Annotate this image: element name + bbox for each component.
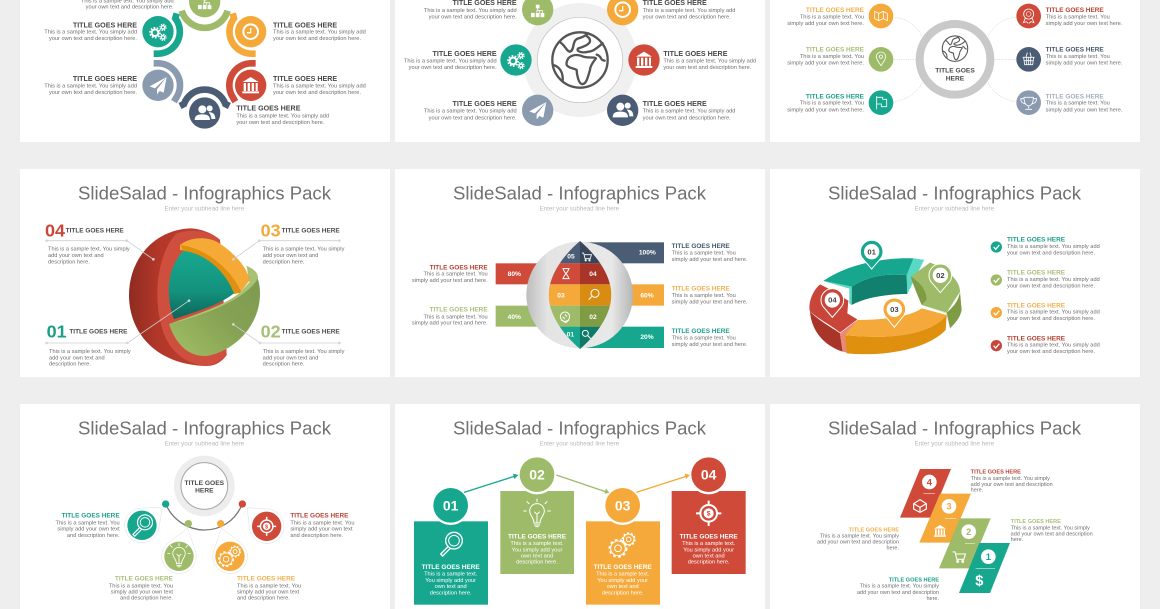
subheading: Enter your subhead line here	[540, 440, 620, 447]
text: top right: your own text and description here.	[643, 15, 731, 21]
text: step 1: TITLE GOES HERE	[889, 578, 939, 584]
hub ring	[920, 24, 990, 95]
ring segment: teal	[823, 258, 924, 305]
card 02: 02	[529, 467, 545, 483]
text: teal item: This is a sample text. You	[56, 520, 120, 526]
percentage labels: 20%	[640, 334, 654, 341]
subheading: Enter your subhead line here	[165, 440, 245, 447]
text: trophy item: simply add your own text here.	[1046, 107, 1123, 113]
label 04	[45, 220, 130, 265]
icon: bank node	[235, 70, 266, 101]
list item 4: This is a sample text. You simply add	[1007, 343, 1100, 349]
central badge: TITLE GOES	[185, 480, 225, 487]
pin 01	[860, 240, 883, 269]
text: middle right: your own text and description here.	[663, 65, 752, 71]
text: step 4	[971, 470, 1053, 494]
text: step 2: This is a sample text. You simply	[1011, 525, 1090, 531]
card 04: TITLE GOES HERE	[680, 534, 738, 541]
text: users step: your own text and description here.	[236, 120, 325, 126]
segment icons	[560, 253, 599, 339]
list item 4	[991, 335, 1100, 355]
icon: target: $	[265, 524, 268, 530]
card 03: This is a sample text.	[596, 572, 650, 578]
segment numbers: 05	[567, 254, 575, 261]
icon: org chart node	[189, 0, 220, 17]
text: red item: simply add your text and here.	[412, 278, 488, 284]
panel: hub and spoke	[770, 0, 1140, 142]
text: bottom left: your own text and description here.	[429, 115, 517, 121]
text: red item: and description here.	[290, 533, 344, 539]
subheading: Enter your subhead line here	[165, 205, 245, 212]
pin 02: 02	[936, 271, 945, 280]
label 02	[261, 321, 345, 368]
heading: SlideSalad - Infographics Pack	[78, 417, 332, 438]
list item 1: This is a sample text. You simply add	[1007, 244, 1100, 250]
step 1: $	[975, 573, 983, 589]
panel: isometric ring	[770, 169, 1140, 377]
globe ring	[523, 3, 637, 117]
connecting arc	[166, 504, 242, 530]
label 01: This is a sample text. You simply	[49, 349, 131, 355]
text: green item: TITLE GOES HERE	[430, 307, 488, 314]
ring segment: red	[809, 284, 857, 353]
text: plane step: your own text and description here.	[49, 90, 137, 96]
text: step 2	[1011, 519, 1093, 543]
text: red item: This is a sample text. You	[424, 272, 488, 278]
step 4	[900, 469, 951, 518]
text: teal item: simply add your text and here.	[672, 342, 748, 348]
text: flag item: simply add your own text here.	[787, 107, 864, 113]
panel: six-step hexagon cycle	[20, 0, 390, 142]
label 03: 03	[261, 220, 281, 240]
pin 04: 04	[828, 296, 837, 305]
step 2	[939, 518, 991, 568]
text: flag item: TITLE GOES HERE	[806, 93, 865, 100]
text: gears step: TITLE GOES HERE	[73, 21, 137, 29]
text: clock step	[273, 21, 366, 42]
dashed connectors	[894, 17, 1016, 102]
step 3	[919, 494, 971, 543]
text: orange item: This is a sample text. You	[237, 583, 301, 589]
label 04: TITLE GOES HERE	[66, 228, 124, 235]
text: map item: simply add your own text here.	[787, 21, 864, 27]
text: pin item: TITLE GOES HERE	[806, 47, 865, 54]
text: flag item: This is a sample text. You	[800, 101, 864, 107]
card 03: TITLE GOES HERE	[594, 564, 652, 571]
text: orange item: This is a sample text. You	[672, 293, 736, 299]
text: teal item: simply add your own text	[57, 527, 120, 533]
list item 4: your own text and description here.	[1007, 349, 1095, 355]
panel: layered sphere	[20, 169, 390, 377]
card 01: TITLE GOES HERE	[422, 564, 480, 571]
text: middle left	[404, 50, 497, 71]
card 02	[500, 455, 574, 574]
card 03: own text and	[607, 584, 639, 590]
card 01: own text and	[435, 584, 467, 590]
step 4: 4	[927, 477, 933, 487]
text: trophy item: TITLE GOES HERE	[1046, 93, 1104, 100]
text: green item: and description here.	[120, 596, 173, 602]
text: map item: This is a sample text. You	[800, 14, 864, 20]
text: step 4: here.	[971, 488, 984, 494]
text: gears step: your own text and description here.	[49, 36, 137, 42]
text: clock step: your own text and description here.	[273, 36, 361, 42]
callout lines	[47, 241, 339, 343]
label 01	[47, 321, 131, 368]
text: award item: TITLE GOES HERE	[1046, 7, 1104, 14]
icon: paper plane node	[142, 70, 174, 101]
text: green item: This is a sample text. You	[424, 314, 488, 320]
text: bottom left: This is a sample text. You simply add	[424, 109, 517, 115]
text: top right	[643, 0, 735, 21]
list item 4: TITLE GOES HERE	[1007, 335, 1066, 342]
pin 03: 03	[890, 305, 899, 314]
text: step 4: add your own text and description	[971, 482, 1053, 488]
card 01	[414, 486, 488, 605]
sphere illustration	[129, 228, 260, 366]
text: green item: simply add your text and here.	[412, 321, 488, 327]
text: pin item: simply add your own text here.	[787, 61, 864, 67]
card 02: TITLE GOES HERE	[508, 534, 567, 541]
text: users step: This is a sample text. You simply add	[236, 113, 329, 119]
text: basket item	[1046, 47, 1123, 67]
step 1: 1	[986, 552, 991, 562]
list item 2: TITLE GOES HERE	[1007, 270, 1066, 277]
icon: gears	[215, 542, 245, 571]
ring segment: green	[911, 263, 962, 328]
text: step 1: here.	[926, 596, 939, 602]
list item 3	[991, 302, 1100, 322]
label 03: TITLE GOES HERE	[282, 228, 340, 235]
text: award item: simply add your own text here.	[1046, 21, 1123, 27]
text: teal item: This is a sample text. You	[672, 336, 736, 342]
card 01: You simply add your	[425, 578, 476, 584]
list item 3: This is a sample text. You simply add	[1007, 310, 1100, 316]
text: step 1	[857, 578, 939, 602]
label 02: 02	[261, 321, 281, 341]
text: basket item: simply add your own text here.	[1046, 61, 1123, 67]
text: step 3: add your own text and description	[817, 540, 899, 546]
panel: globe with six items	[395, 0, 765, 142]
card 03: description here.	[602, 590, 644, 596]
list item 1	[991, 237, 1100, 256]
pin 02	[929, 264, 952, 293]
icon: globe	[942, 36, 968, 61]
text: top step	[81, 0, 174, 11]
card 04: This is a sample text.	[682, 541, 736, 547]
heading: SlideSalad - Infographics Pack	[453, 182, 707, 203]
list item 1: TITLE GOES HERE	[1007, 237, 1066, 244]
text: navy item: This is a sample text. You	[672, 251, 736, 257]
text: map item: TITLE GOES HERE	[806, 7, 865, 14]
text: trophy item	[1046, 93, 1123, 113]
icon: target	[252, 512, 281, 541]
text: middle right: This is a sample text. You simply add	[663, 59, 756, 65]
panel: stepped parallelograms	[770, 404, 1140, 609]
heading: SlideSalad - Infographics Pack	[828, 417, 1082, 438]
heading: SlideSalad - Infographics Pack	[78, 182, 332, 203]
text: bottom left: TITLE GOES HERE	[453, 100, 517, 108]
card 03: You simply add your	[597, 578, 648, 584]
label 02: add your own text and	[263, 355, 318, 361]
icon: users node	[607, 95, 638, 126]
icon: plane node	[522, 95, 553, 126]
text: step 2: TITLE GOES HERE	[1011, 519, 1061, 525]
text: users step: TITLE GOES HERE	[236, 105, 301, 113]
cycle arcs	[154, 11, 256, 106]
icon: bank node	[628, 44, 660, 76]
text: green item: This is a sample text. You	[109, 583, 173, 589]
text: teal item: TITLE GOES HERE	[672, 328, 730, 335]
text: teal item	[56, 513, 120, 539]
silver sphere	[526, 242, 633, 348]
list item 3: your own text and description here.	[1007, 316, 1095, 322]
text: green item: TITLE GOES HERE	[115, 576, 174, 583]
card 04: description here.	[688, 560, 730, 566]
panel: segmented lens with percentage bars	[395, 169, 765, 377]
percentage labels	[508, 250, 656, 341]
label 01: add your own text and	[49, 355, 105, 361]
arrow: 01 to 02	[464, 474, 518, 492]
text: teal item: and description here.	[67, 533, 120, 539]
icon: pin node	[869, 47, 893, 72]
icon: users node	[189, 97, 220, 129]
text: teal item	[672, 328, 748, 348]
text: gears step	[44, 21, 137, 42]
percentage bars	[496, 242, 664, 348]
icon: clock node	[607, 0, 638, 25]
label 04: This is a sample text. You simply	[48, 247, 130, 253]
ring segment: orange	[844, 308, 947, 354]
icon: award node	[1016, 4, 1041, 28]
label 04: add your own text and	[48, 253, 104, 259]
label 01: TITLE GOES HERE	[69, 329, 128, 336]
text: navy item	[672, 243, 748, 263]
text: navy item: TITLE GOES HERE	[672, 243, 730, 250]
text: orange item: TITLE GOES HERE	[237, 576, 296, 583]
percentage labels: 40%	[508, 314, 521, 321]
icon: flag node	[869, 90, 893, 115]
text: trophy item: This is a sample text. You	[1046, 101, 1110, 107]
label 02: This is a sample text. You simply	[263, 349, 345, 355]
heading: SlideSalad - Infographics Pack	[453, 417, 707, 438]
text: red item: simply add your own text	[290, 527, 353, 533]
percentage labels: 80%	[508, 271, 521, 278]
card 02: own text and	[521, 554, 553, 560]
card 02: This is a sample text.	[510, 541, 564, 547]
text: orange item	[672, 286, 748, 305]
card 04: You simply add your	[683, 547, 734, 553]
text: step 2: here.	[1011, 537, 1024, 543]
label 03	[261, 220, 345, 265]
list item 2: This is a sample text. You simply add	[1007, 277, 1100, 283]
text: red item: TITLE GOES HERE	[430, 264, 488, 271]
text: pin item: This is a sample text. You	[800, 54, 864, 60]
card 04: 04	[701, 467, 717, 483]
text: plane step: This is a sample text. You simply add	[44, 83, 137, 89]
text: orange item: simply add your text and here.	[672, 299, 748, 305]
label 01: 01	[47, 321, 67, 341]
text: red item	[412, 264, 488, 284]
label 03: add your own text and	[263, 253, 318, 259]
pin 04	[821, 289, 844, 317]
text: bank step	[273, 75, 366, 96]
hub label: HERE	[946, 75, 965, 82]
pin 01: 01	[867, 247, 877, 256]
list item 3: TITLE GOES HERE	[1007, 302, 1066, 309]
subheading: Enter your subhead line here	[915, 440, 995, 447]
text: step 3: TITLE GOES HERE	[849, 527, 899, 533]
text: step 1: This is a sample text. You simply	[860, 584, 939, 590]
percentage labels: 60%	[640, 292, 654, 299]
list item 2: your own text and description here.	[1007, 283, 1095, 289]
text: basket item: TITLE GOES HERE	[1046, 47, 1104, 54]
text: pin item	[787, 47, 865, 67]
text: orange item	[237, 576, 301, 602]
card 03	[586, 486, 660, 605]
card 04: own text and	[693, 554, 725, 560]
step 2: 2	[966, 527, 971, 537]
card 02: You simply add your	[512, 547, 562, 553]
icon: org chart node	[522, 0, 553, 25]
arrow: 02 to 03	[556, 475, 609, 494]
card 04: $	[707, 511, 711, 518]
callout dots	[45, 239, 341, 344]
icon: bulb	[164, 542, 194, 571]
panel: four stepped cards	[395, 404, 765, 609]
text: red item: TITLE GOES HERE	[290, 513, 349, 520]
text: middle left: TITLE GOES HERE	[433, 50, 497, 58]
text: top step: your own text and description here.	[86, 5, 174, 11]
percentage labels: 100%	[639, 250, 656, 257]
text: step 3: This is a sample text. You simply	[820, 534, 899, 540]
segment numbers	[557, 254, 597, 339]
icon: trophy node	[1016, 90, 1041, 115]
text: navy item: simply add your text and here.	[672, 257, 748, 263]
text: top left	[424, 0, 517, 21]
segment numbers: 01	[567, 332, 574, 339]
text: bottom left	[424, 100, 517, 121]
text: award item: This is a sample text. You	[1046, 14, 1110, 20]
label 01: description here.	[49, 362, 91, 368]
text: clock step: TITLE GOES HERE	[273, 21, 337, 29]
text: top right: This is a sample text. You simply add	[643, 8, 735, 14]
segment numbers: 03	[557, 292, 565, 299]
text: red item: This is a sample text. You	[290, 520, 354, 526]
icon: gears node	[500, 44, 532, 76]
step 1	[959, 543, 1010, 593]
card 04	[672, 455, 746, 574]
text: award item	[1046, 7, 1123, 27]
text: gears step: This is a sample text. You simply add	[44, 30, 137, 36]
step 3: 3	[946, 502, 952, 512]
text: green item: simply add your own text	[111, 590, 173, 596]
hub label	[935, 68, 975, 82]
text: orange item: TITLE GOES HERE	[672, 286, 730, 293]
icon: globe	[552, 32, 608, 88]
text: step 3: here.	[886, 546, 899, 552]
text: users step	[236, 105, 329, 126]
lens segments	[548, 240, 612, 350]
card 02: description here.	[516, 560, 558, 566]
card 03: 03	[615, 497, 631, 513]
text: top left: This is a sample text. You simply add	[424, 8, 517, 14]
subheading: Enter your subhead line here	[915, 205, 995, 212]
text: step 4: TITLE GOES HERE	[971, 470, 1021, 476]
text: middle left: This is a sample text. You simply add	[404, 59, 497, 65]
icon: map node	[869, 4, 893, 28]
text: middle right: TITLE GOES HERE	[663, 50, 728, 58]
text: plane step: TITLE GOES HERE	[73, 75, 137, 83]
central badge	[174, 456, 235, 516]
pin 03	[883, 298, 906, 327]
text: top left: your own text and description here.	[429, 15, 517, 21]
list item 2	[991, 270, 1100, 289]
text: orange item: and description here.	[237, 596, 290, 602]
text: green item	[412, 307, 488, 327]
text: orange item: simply add your own text	[237, 590, 300, 596]
label 02: TITLE GOES HERE	[282, 329, 340, 336]
text: step 3	[817, 527, 899, 552]
text: bottom right: TITLE GOES HERE	[643, 100, 707, 108]
arc dots	[162, 500, 246, 527]
text: map item	[787, 7, 865, 27]
label 04: description here.	[48, 259, 90, 265]
icon: clock node	[235, 16, 266, 47]
text: step 1: add your own text and description	[857, 590, 939, 596]
text: bank step: This is a sample text. You simply add	[273, 83, 366, 89]
card 01: description here.	[430, 590, 472, 596]
icon: gears node	[142, 16, 174, 47]
label 03: This is a sample text. You simply	[263, 247, 345, 253]
text: step 4: This is a sample text. You simply	[971, 476, 1050, 482]
label 04: 04	[45, 220, 65, 240]
card 01: 01	[443, 497, 459, 513]
segment numbers: 04	[589, 271, 597, 278]
text: bank step: your own text and description here.	[273, 90, 361, 96]
central badge: HERE	[195, 488, 214, 495]
droplet outlines	[125, 508, 284, 574]
arrow: 03 to 04	[636, 474, 690, 492]
label 02: description here.	[263, 362, 305, 368]
card 01: This is a sample text.	[424, 572, 478, 578]
text: middle right	[663, 50, 756, 71]
text: bottom right: your own text and description here.	[643, 115, 731, 121]
text: middle left: your own text and description here.	[409, 65, 497, 71]
text: clock step: This is a sample text. You simply add	[273, 30, 366, 36]
icon: magnifier	[127, 511, 157, 540]
text: plane step	[44, 75, 137, 96]
text: bottom right	[643, 100, 735, 121]
text: step 2: add your own text and description	[1011, 531, 1093, 537]
text: flag item	[787, 93, 865, 113]
text: basket item: This is a sample text. You	[1046, 54, 1110, 60]
subheading: Enter your subhead line here	[540, 205, 620, 212]
list item 1: your own text and description here.	[1007, 250, 1095, 256]
text: bottom right: This is a sample text. You simply add	[643, 109, 735, 115]
heading: SlideSalad - Infographics Pack	[828, 182, 1082, 203]
text: red item	[290, 513, 354, 539]
panel: arc with four droplets	[20, 404, 390, 609]
icon: basket node	[1016, 47, 1041, 72]
label 03: description here.	[263, 259, 305, 265]
segment numbers: 02	[589, 314, 597, 321]
text: bank step: TITLE GOES HERE	[273, 75, 337, 83]
hub label: TITLE GOES	[935, 68, 975, 75]
text: green item	[109, 576, 174, 602]
text: teal item: TITLE GOES HERE	[62, 513, 120, 520]
